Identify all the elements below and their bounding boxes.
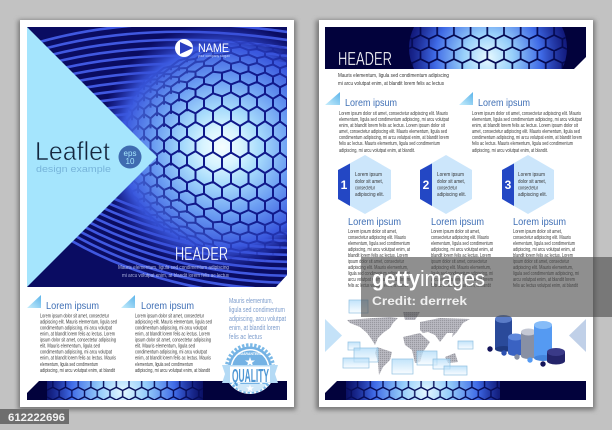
column: Lorem ipsum 1: Lorem ipsum dolor sit amet, consectetur bbox=[40, 314, 109, 320]
hexagon callout 2: 2 bbox=[423, 178, 430, 192]
side note text: adipiscing, arcu volutpat bbox=[229, 316, 286, 323]
cover image with hexagon sphere bbox=[27, 27, 287, 287]
lower column 3: blandit lorem felis ac lectus. Lorem bbox=[513, 253, 573, 259]
lower column 3: felis ac lectus volutpat enim, at blandit bbox=[513, 283, 578, 289]
column: Lorem ipsum 2 bbox=[121, 295, 212, 374]
watermark: gettyimages credit bbox=[361, 257, 612, 317]
column: Lorem ipsum 2: elementum, ligula sed condimentum bbox=[135, 362, 193, 368]
section: Lorem ipsum left: adipiscing, mi arcu volutpat enim, at blandit. bbox=[339, 148, 415, 154]
lower column 1: Lorem ipsum bbox=[348, 217, 401, 228]
hexagon callout 1: consectetur bbox=[355, 186, 375, 192]
hexagon callout 3: adipiscing elit. bbox=[518, 192, 547, 198]
lower column 3: consectetur adipiscing elit. Mauris bbox=[513, 235, 571, 241]
section: Lorem ipsum left: felis ac lectus. Mauris elementum, ligula sed condimentum bbox=[339, 141, 440, 147]
column: Lorem ipsum 1: ipsum dolor sit amet, consectetur adipiscing bbox=[40, 338, 116, 344]
section: Lorem ipsum right: Lorem ipsum dolor sit amet, consectetur adipiscing elit. Mauris bbox=[472, 111, 581, 117]
column: Lorem ipsum 2: Lorem ipsum bbox=[141, 301, 194, 312]
column: Lorem ipsum 1: elementum, ligula sed condimentum bbox=[40, 362, 98, 368]
column: Lorem ipsum 2: condimentum adipiscing, mi arcu volutpat bbox=[135, 350, 207, 356]
side note text bbox=[229, 298, 286, 341]
lower column 1: arcu volutpat enim, at blandit lorem bbox=[348, 277, 410, 283]
lower column 3 bbox=[513, 217, 579, 289]
watermark: gettyimages credit: gettyimages bbox=[372, 266, 485, 291]
badge: eps 10: eps bbox=[124, 149, 136, 158]
cover header: mi arcu volutpat enim, at blandit lorem felis ac lectus bbox=[122, 273, 229, 279]
hexagon callout 2 bbox=[420, 155, 472, 214]
column: Lorem ipsum 2: enim, at blandit lorem felis ac lectus. Lorem bbox=[135, 332, 210, 338]
lower column 3: arcu volutpat enim, at blandit lorem bbox=[513, 277, 575, 283]
column: Lorem ipsum 1: adipiscing, mi arcu volutpat enim, at blandit bbox=[40, 368, 115, 374]
column: Lorem ipsum 1: enim, at blandit lorem felis ac lectus. Mauris bbox=[40, 356, 116, 362]
hexagon callout 1: Lorem ipsum bbox=[355, 172, 382, 178]
badge: eps 10 bbox=[118, 146, 142, 168]
badge: eps 10: 10 bbox=[126, 157, 135, 166]
section: Lorem ipsum right: condimentum adipiscing, mi arcu volutpat enim, at blandit lorem bbox=[472, 135, 582, 141]
hexagon callout 3: 3 bbox=[505, 178, 512, 192]
cover header bbox=[118, 244, 229, 279]
hexagon callout 1: dolor sit amet, bbox=[355, 179, 383, 185]
lower column 2: felis ac lectus volutpat enim, at blandit bbox=[431, 283, 491, 289]
column: Lorem ipsum 2: adipiscing elit. Mauris elementum, ligula sed bbox=[135, 320, 212, 326]
hexagon callout 3 bbox=[502, 155, 554, 214]
lower column 1: elementum, ligula sed condimentum bbox=[348, 241, 410, 247]
column: Lorem ipsum 1: condimentum adipiscing, mi arcu volutpat bbox=[40, 350, 112, 356]
section: Lorem ipsum left: condimentum adipiscing, mi arcu volutpat enim, at blandit lorem bbox=[339, 135, 449, 141]
column: Lorem ipsum 2: ipsum dolor sit amet, consectetur adipiscing bbox=[135, 338, 211, 344]
side note text: felis ac lectus bbox=[229, 334, 262, 341]
section: Lorem ipsum right: enim, at blandit lorem felis ac lectus. Lorem ipsum dolor sit bbox=[472, 123, 578, 129]
logo: play icon and NAME: NAME bbox=[198, 41, 229, 55]
hexagon callout 1: 1 bbox=[341, 178, 348, 192]
lower column 3: adipiscing elit. Mauris elementum, bbox=[513, 265, 573, 271]
section: Lorem ipsum right: adipiscing, mi arcu volutpat enim, at blandit. bbox=[472, 148, 548, 154]
lower column 1 bbox=[348, 217, 410, 289]
column: Lorem ipsum 2: Lorem ipsum dolor sit amet, consectetur bbox=[135, 314, 204, 320]
top header band bbox=[325, 27, 586, 69]
lower column 2: Lorem ipsum bbox=[431, 217, 484, 228]
logo: play icon and NAME: your company slogan bbox=[198, 53, 230, 58]
hexagon callout 2: consectetur bbox=[437, 186, 457, 192]
column: Lorem ipsum 2: elit. Mauris elementum, ligula sed bbox=[135, 344, 195, 350]
bottom hexagon band bbox=[27, 381, 287, 400]
arrow: left triangle bbox=[325, 319, 342, 352]
section: Lorem ipsum right: amet, consectetur adipiscing elit. Mauris elementum, ligula sed bbox=[472, 129, 580, 135]
section: Lorem ipsum left: enim, at blandit lorem felis ac lectus. Lorem ipsum dolor sit bbox=[339, 123, 445, 129]
lower column 1: consectetur adipiscing elit. Mauris bbox=[348, 235, 406, 241]
section: Lorem ipsum left: Lorem ipsum bbox=[345, 98, 397, 109]
lower column 2: consectetur adipiscing elit. Mauris bbox=[431, 235, 489, 241]
lower column 2: ipsum dolor sit amet, consectetur bbox=[431, 259, 487, 265]
side note text: ligula sed condimentum bbox=[229, 307, 285, 314]
column: Lorem ipsum 2: adipiscing, mi arcu volutpat enim, at blandit bbox=[135, 368, 210, 374]
cover header: Mauris elementum, ligula sed condimentum adipiscing bbox=[118, 265, 229, 271]
lower column 2: arcu volutpat enim, at blandit lorem bbox=[431, 277, 493, 283]
section: Lorem ipsum left: Lorem ipsum dolor sit amet, consectetur adipiscing elit. Mauris bbox=[339, 111, 448, 117]
intro text: Mauris elementum, ligula sed condimentum adipiscing bbox=[338, 73, 449, 79]
lower column 2: Lorem ipsum dolor sit amet, bbox=[431, 229, 480, 235]
column: Lorem ipsum 1: adipiscing elit. Mauris elementum, ligula sed bbox=[40, 320, 117, 326]
section: Lorem ipsum right: elementum, ligula sed condimentum adipiscing, mi arcu volutpat bbox=[472, 117, 582, 123]
3D bar chart bbox=[487, 315, 565, 367]
section: Lorem ipsum right: Lorem ipsum bbox=[478, 98, 530, 109]
lower column 2: blandit lorem felis ac lectus. Lorem bbox=[431, 253, 491, 259]
lower column 1: ligula sed condimentum adipiscing, mi bbox=[348, 271, 410, 277]
hexagon callout 2: adipiscing elit. bbox=[437, 192, 466, 198]
panel: right page bbox=[316, 20, 595, 410]
lower column 3: Lorem ipsum bbox=[513, 217, 566, 228]
section: Lorem ipsum left: elementum, ligula sed condimentum adipiscing, mi arcu volutpat bbox=[339, 117, 449, 123]
hexagon callout 3: dolor sit amet, bbox=[518, 179, 546, 185]
title: Leaflet: Leaflet bbox=[35, 136, 111, 166]
lower column 2 bbox=[431, 217, 493, 289]
light blue triangle bbox=[27, 27, 157, 287]
quality seal badge: GUARANTEED bbox=[238, 352, 262, 356]
hexagon callout 2: Lorem ipsum bbox=[437, 172, 464, 178]
column: Lorem ipsum 1: elit. Mauris elementum, ligula sed bbox=[40, 344, 100, 350]
side note text: Mauris elementum, bbox=[229, 298, 273, 305]
quality seal badge bbox=[222, 343, 278, 394]
section: Lorem ipsum right bbox=[459, 92, 582, 154]
column: Lorem ipsum 2: condimentum adipiscing, mi arcu volutpat bbox=[135, 326, 207, 332]
hexagon callout 1 bbox=[338, 155, 391, 214]
hexagon callout 1: adipiscing elit. bbox=[355, 192, 384, 198]
section: Lorem ipsum left bbox=[325, 92, 449, 154]
section: Lorem ipsum left: amet, consectetur adipiscing elit. Mauris elementum, ligula sed bbox=[339, 129, 447, 135]
lower column 1: blandit lorem felis ac lectus. Lorem bbox=[348, 253, 408, 259]
column: Lorem ipsum 1 bbox=[27, 295, 117, 374]
column: Lorem ipsum 1: Lorem ipsum bbox=[46, 301, 99, 312]
lower column 3: adipiscing, mi arcu volutpat enim, at bbox=[513, 247, 575, 253]
lower column 3: ipsum dolor sit amet, consectetur bbox=[513, 259, 569, 265]
lower column 3: Lorem ipsum dolor sit amet, bbox=[513, 229, 562, 235]
lower column 2: elementum, ligula sed condimentum bbox=[431, 241, 493, 247]
section: Lorem ipsum right: felis ac lectus. Mauris elementum, ligula sed condimentum bbox=[472, 141, 573, 147]
intro text bbox=[338, 73, 449, 87]
lower column 1: ipsum dolor sit amet, consectetur bbox=[348, 259, 404, 265]
lower column 1: adipiscing elit. Mauris elementum, bbox=[348, 265, 408, 271]
image id tag: 612222696 bbox=[8, 412, 65, 424]
lower column 1: Lorem ipsum dolor sit amet, bbox=[348, 229, 397, 235]
world map bbox=[343, 300, 473, 375]
subtitle: design example: design example bbox=[36, 164, 111, 174]
column: Lorem ipsum 2: enim, at blandit lorem felis ac lectus. Mauris bbox=[135, 356, 211, 362]
lower column 3: ligula sed condimentum adipiscing, mi bbox=[513, 271, 579, 277]
column: Lorem ipsum 1: condimentum adipiscing, mi arcu volutpat bbox=[40, 326, 112, 332]
header title: HEADER bbox=[338, 49, 392, 69]
hexagon callout 3: consectetur bbox=[518, 186, 538, 192]
arrow: right triangle bbox=[569, 319, 586, 352]
lower column 3: elementum, ligula sed condimentum bbox=[513, 241, 575, 247]
image id tag bbox=[0, 409, 69, 424]
lower column 2: ligula sed condimentum adipiscing, mi bbox=[431, 271, 493, 277]
lower column 1: felis ac lectus volutpat enim, at blandit bbox=[348, 283, 408, 289]
panel: left page cover bbox=[18, 20, 322, 410]
hexagon callout 3: Lorem ipsum bbox=[518, 172, 545, 178]
watermark: gettyimages credit: Credit: derrrek bbox=[372, 294, 467, 308]
lower column 2: adipiscing elit. Mauris elementum, bbox=[431, 265, 491, 271]
hexagon callout 2: dolor sit amet, bbox=[437, 179, 465, 185]
intro text: mi arcu volutpat enim, at blandit lorem felis ac lectus bbox=[338, 81, 444, 87]
column: Lorem ipsum 1: enim, at blandit lorem felis ac lectus. Lorem bbox=[40, 332, 115, 338]
cover header: HEADER bbox=[175, 244, 228, 264]
side note text: enim, at blandit lorem bbox=[229, 325, 280, 332]
quality seal badge: QUALITY bbox=[232, 366, 269, 386]
lower column 1: adipiscing, mi arcu volutpat enim, at bbox=[348, 247, 410, 253]
bottom hexagon band bbox=[325, 381, 586, 400]
logo: play icon and NAME bbox=[175, 39, 230, 58]
lower column 2: adipiscing, mi arcu volutpat enim, at bbox=[431, 247, 493, 253]
